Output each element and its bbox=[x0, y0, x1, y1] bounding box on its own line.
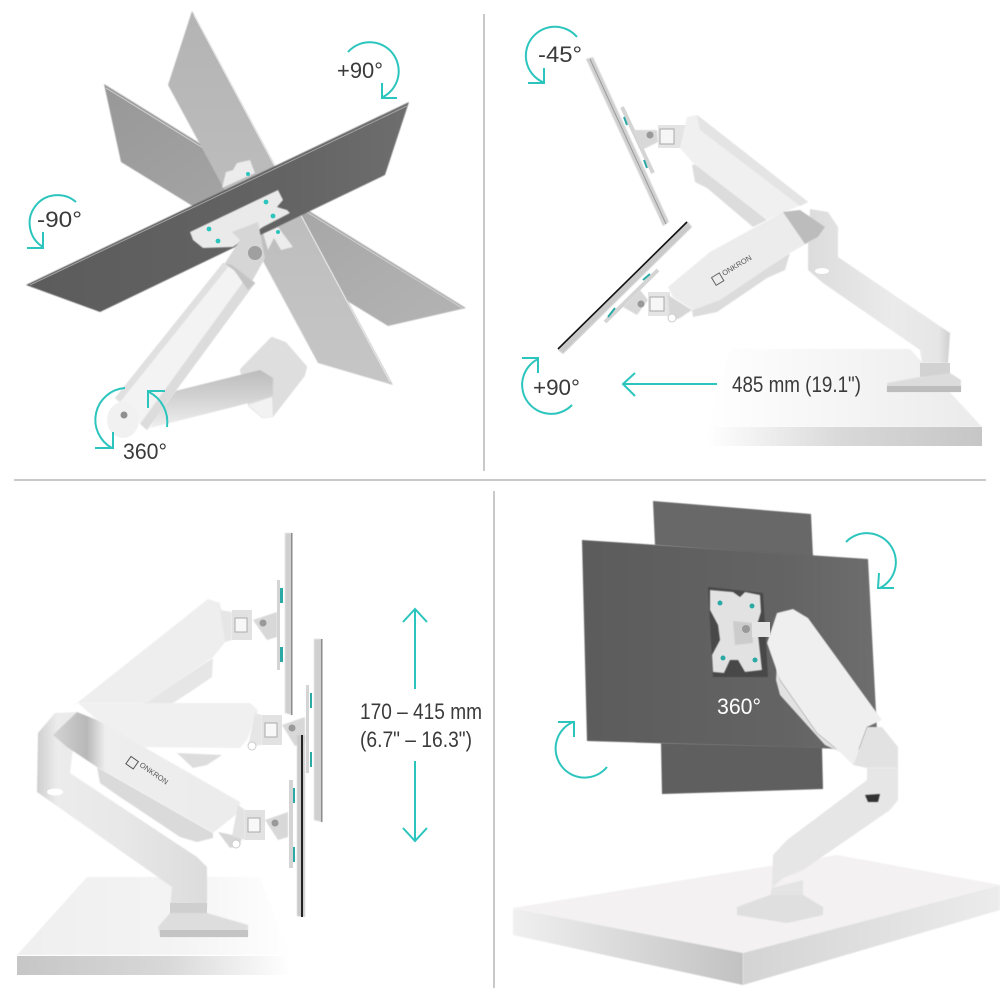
label: height range: 170 – 415 mm bbox=[360, 699, 482, 724]
label: reach: 485 mm (19.1") bbox=[732, 372, 861, 397]
monitor ghost: rotated steep bbox=[104, 84, 466, 326]
arrow: 360 left bbox=[95, 388, 125, 448]
cable slot bbox=[47, 788, 63, 796]
panel: tilt and reach bbox=[522, 27, 982, 446]
main arm lower position bbox=[53, 712, 242, 848]
monitor: tilted up bbox=[586, 57, 669, 226]
upper arm bbox=[115, 263, 255, 430]
monitor: dark landscape bbox=[26, 102, 409, 312]
arrow: -45 bbox=[526, 27, 577, 83]
lower arm position bbox=[668, 210, 825, 322]
arrow: 360 right bbox=[148, 391, 167, 427]
hinge bbox=[752, 622, 770, 637]
arrow: -90 bbox=[27, 195, 76, 248]
brand logo: ONKRON bbox=[720, 253, 753, 278]
panel: portrait and landscape rotation bbox=[26, 11, 466, 464]
lower arm bbox=[150, 370, 273, 428]
tilt neck and bolt bbox=[225, 222, 265, 285]
base arm and elbow bbox=[37, 712, 207, 907]
desk bbox=[513, 855, 1000, 985]
label: -90: -90° bbox=[37, 207, 82, 232]
label: +90: +90° bbox=[533, 375, 580, 400]
bottom hinge and mount bbox=[232, 780, 295, 868]
label: height range bbox=[360, 699, 482, 752]
arm ghost: top position bbox=[72, 599, 232, 730]
arrow: clockwise bbox=[846, 533, 896, 588]
monitor: tilted down bbox=[558, 221, 692, 354]
upper arm position bbox=[680, 115, 808, 227]
clamp base bbox=[887, 363, 961, 392]
arrow: up bbox=[403, 609, 427, 689]
label: +90: +90° bbox=[337, 58, 383, 83]
clamp base bbox=[737, 880, 823, 923]
arrow: +90 bbox=[348, 42, 399, 98]
arm ghost: middle position bbox=[78, 703, 262, 768]
monitor: top bbox=[285, 533, 292, 715]
monitor: main bbox=[582, 540, 878, 750]
arrow: counter-clockwise bbox=[556, 722, 607, 778]
gas spring bbox=[776, 663, 840, 752]
label: height range: (6.7" – 16.3") bbox=[360, 727, 472, 752]
label: 360: 360° bbox=[123, 439, 167, 464]
mount strips and brackets bbox=[605, 107, 687, 322]
arrow: down bbox=[403, 761, 427, 841]
base arm and elbow bbox=[808, 209, 950, 363]
middle hinge and mount bbox=[248, 685, 312, 773]
VESA plate bbox=[710, 590, 762, 673]
monitor ghost: bottom bbox=[661, 743, 823, 794]
wall arm plate bbox=[242, 339, 305, 418]
label: 360: 360° bbox=[717, 694, 761, 719]
panel: height adjustment bbox=[17, 533, 482, 975]
mount plate bbox=[190, 190, 290, 248]
brand logo: ONKRON bbox=[138, 760, 170, 787]
brand logo bbox=[126, 756, 170, 787]
ghost mounting brackets bbox=[222, 160, 293, 250]
lower arm bbox=[772, 768, 898, 888]
monitor: bottom bbox=[297, 735, 305, 917]
arrow: reach bbox=[623, 373, 717, 396]
elbow bbox=[853, 727, 898, 768]
swivel joint bbox=[107, 402, 139, 438]
brand logo bbox=[712, 253, 753, 285]
upper arm bbox=[767, 609, 882, 765]
top hinge and mount bbox=[232, 580, 283, 670]
cable slot bbox=[865, 794, 880, 802]
monitor ghost: top bbox=[653, 501, 813, 557]
VESA plate backing bbox=[708, 587, 768, 677]
cable slot bbox=[815, 268, 829, 274]
monitor: middle bbox=[314, 639, 322, 822]
monitor ghost: rotated portrait bbox=[168, 11, 393, 385]
desk bbox=[17, 877, 290, 975]
clamp base bbox=[158, 903, 248, 937]
label: -45: -45° bbox=[538, 42, 582, 67]
arrow: +90 bbox=[522, 358, 572, 414]
desk bbox=[707, 349, 982, 446]
panel: rotation front view bbox=[513, 501, 1000, 985]
